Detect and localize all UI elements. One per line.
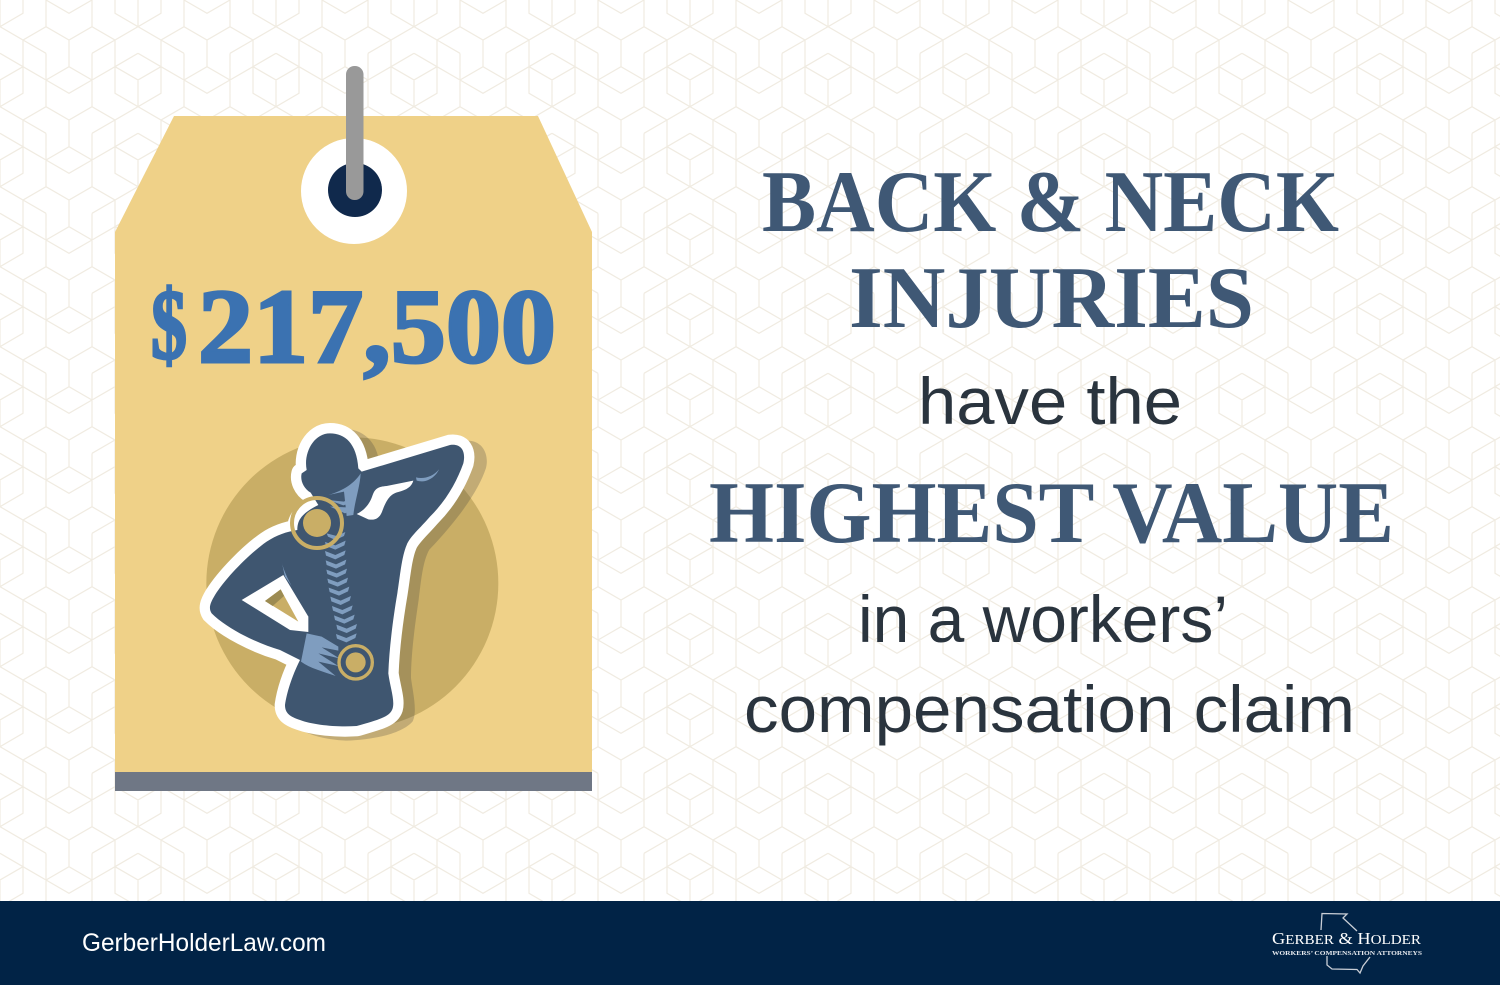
price: 217,500 — [198, 268, 556, 385]
text line: compensation claim: compensation claim — [744, 672, 1355, 746]
arm gap opening — [265, 589, 298, 622]
website: GerberHolderLaw.com — [82, 929, 326, 957]
logo state outline — [1321, 914, 1370, 973]
tag bottom band — [115, 772, 592, 791]
text line: in a workers: in a workers’ — [858, 582, 1228, 656]
tag hole with string — [301, 66, 407, 244]
logo tagline: WORKERS’ COMPENSATION ATTORNEYS — [1272, 950, 1422, 957]
pain ring: neck — [292, 498, 342, 548]
price: $ — [151, 269, 187, 380]
heading line: injuries: INJURIES — [849, 250, 1254, 347]
logo name: GERBER & HOLDER — [1272, 929, 1422, 948]
jaw and neck — [328, 473, 361, 516]
footer bar — [0, 901, 1500, 985]
figure shadow — [213, 429, 487, 741]
headline text block — [709, 154, 1394, 746]
logo — [1272, 914, 1422, 973]
arm gap — [242, 575, 308, 632]
light blue anatomy details — [282, 469, 439, 676]
price tag — [115, 66, 592, 791]
heading line: back and neck: BACK & NECK — [762, 154, 1339, 251]
figure body — [210, 433, 464, 726]
pain ring: lower back — [339, 646, 372, 679]
backdrop circle — [206, 437, 498, 729]
hand — [301, 633, 339, 676]
text line: have the: have the — [918, 364, 1182, 438]
forearm crease — [416, 469, 439, 481]
neck gap — [357, 481, 413, 520]
heading line: highest value: HIGHEST VALUE — [709, 465, 1394, 562]
spine vertebrae — [325, 550, 346, 559]
arm gap shadow — [265, 589, 284, 606]
icon: person with back and neck pain — [206, 429, 498, 741]
arm crease — [282, 562, 292, 586]
tag body — [115, 116, 592, 772]
